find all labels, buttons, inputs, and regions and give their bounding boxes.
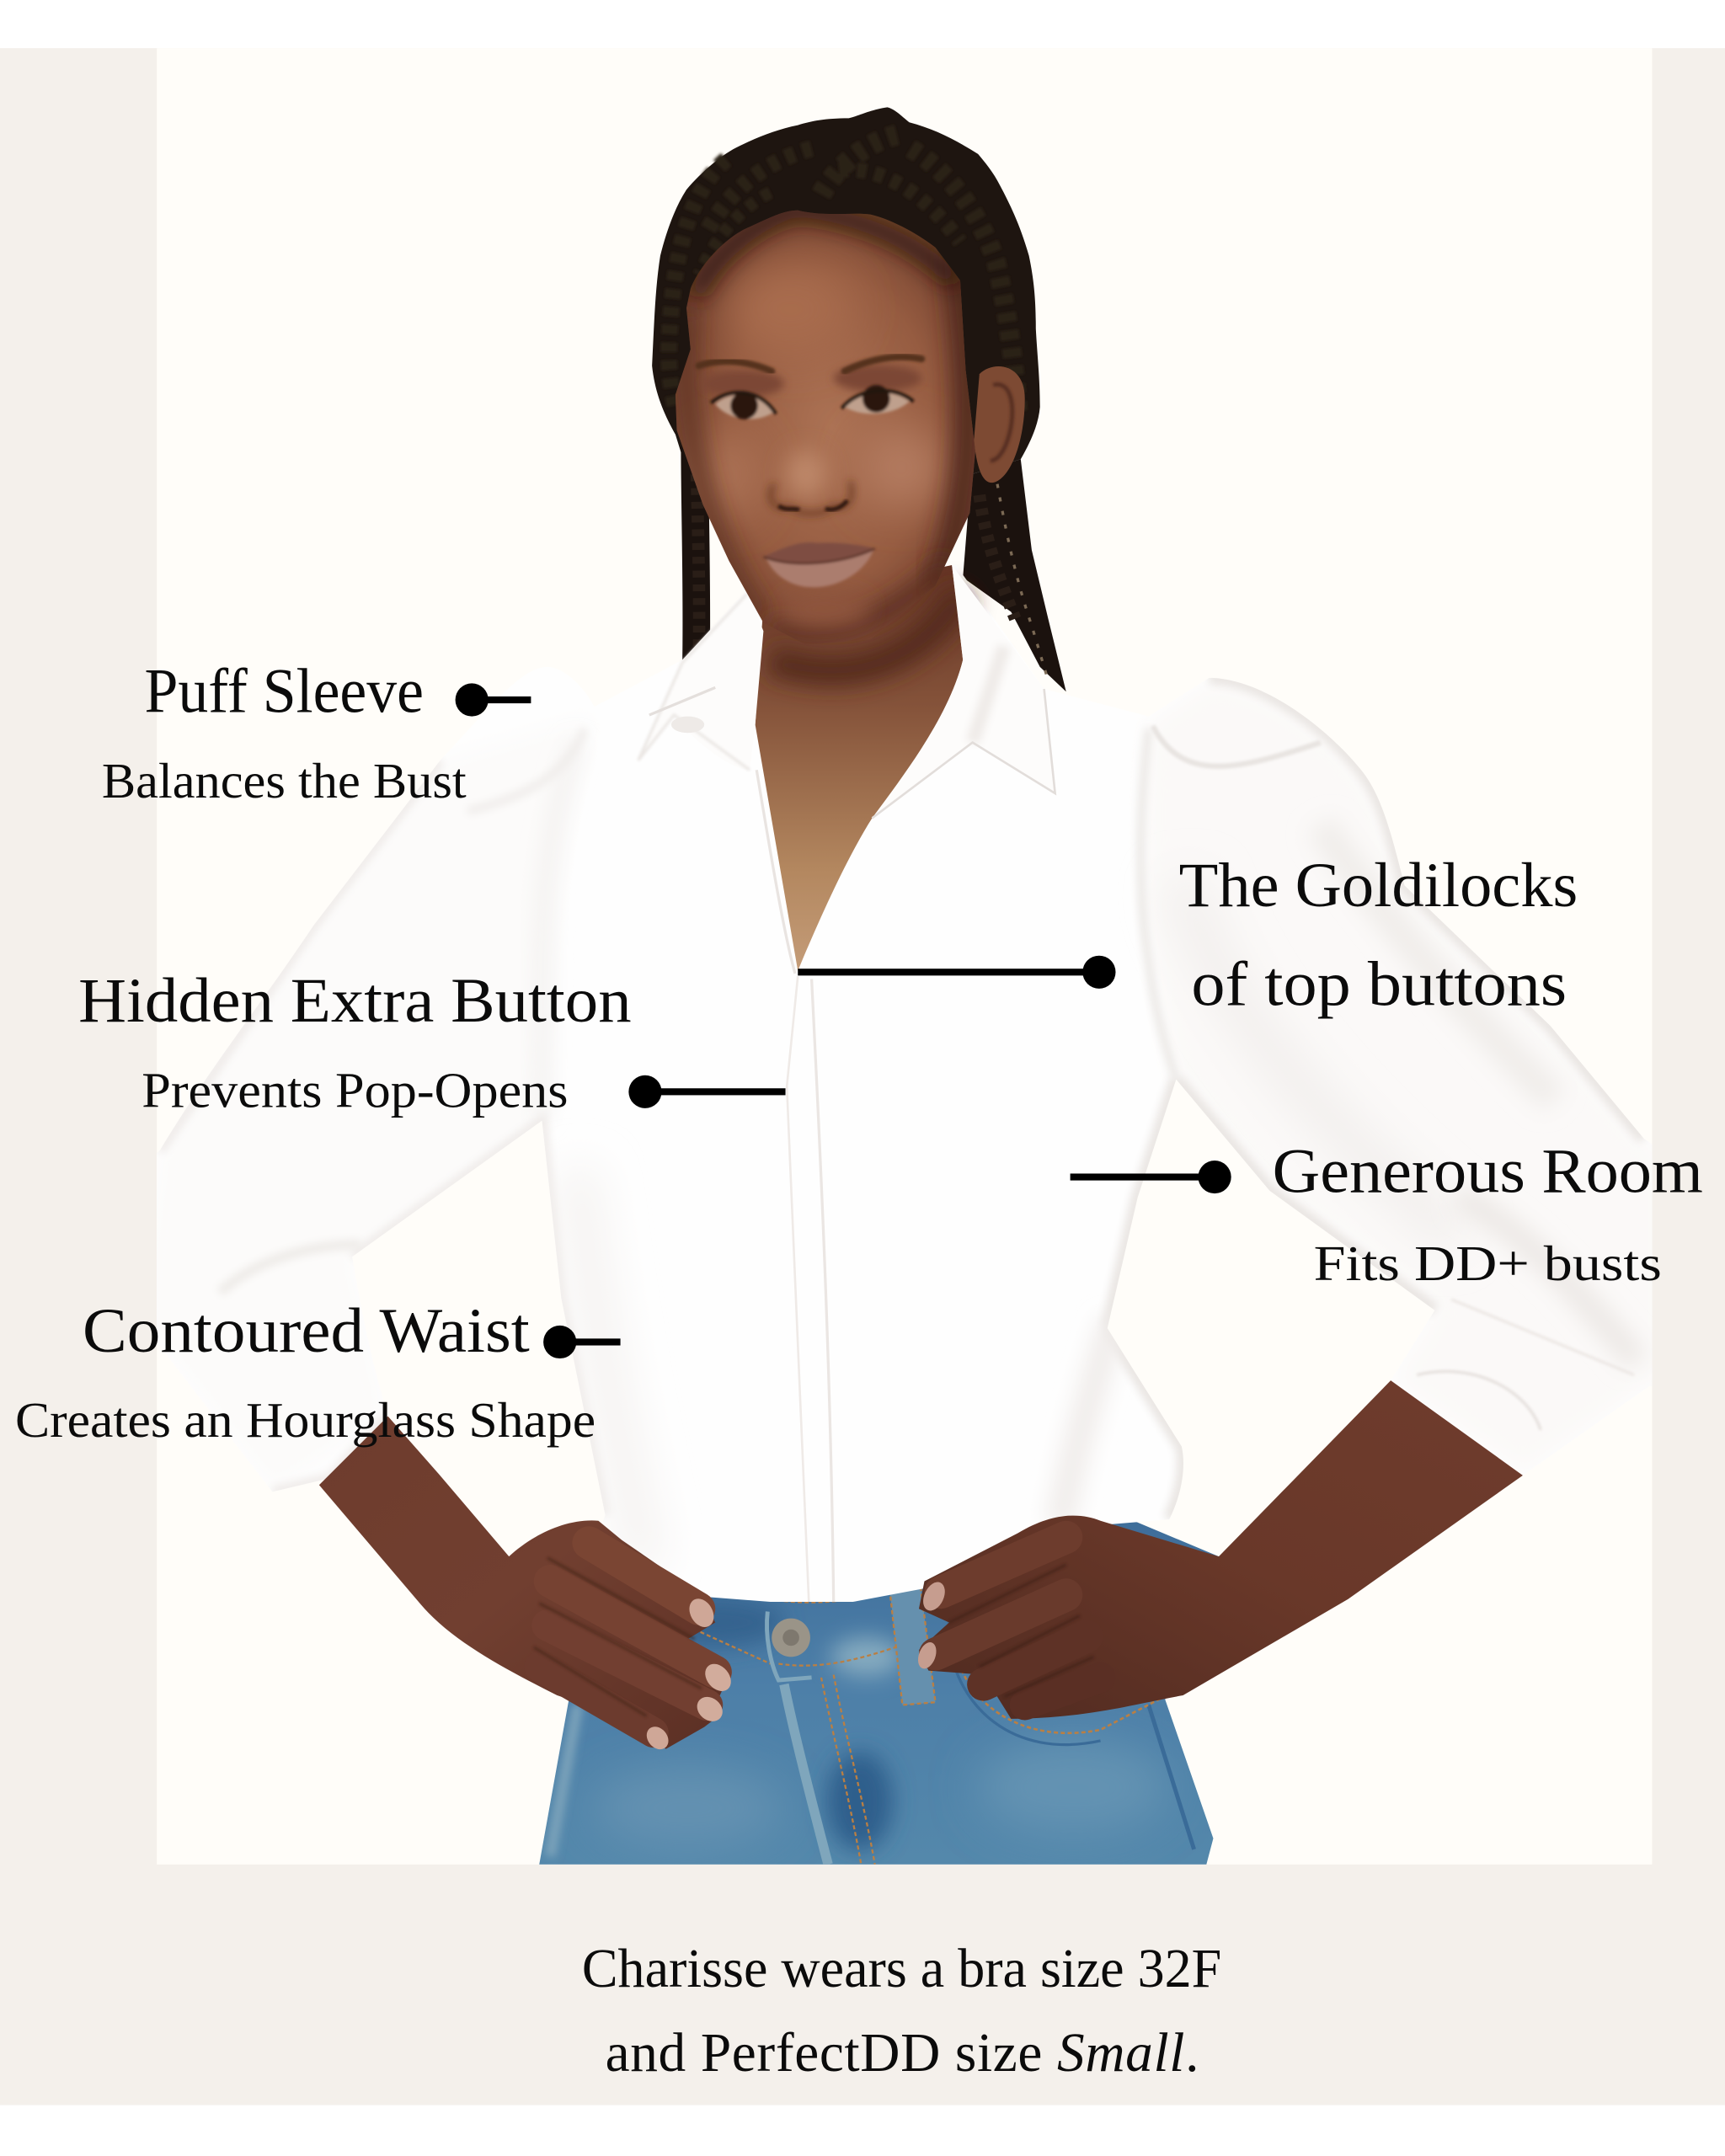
pointer: puff sleeve [456, 683, 531, 717]
pointer: generous room [1071, 1161, 1231, 1193]
edge shading [1108, 678, 1644, 1519]
caption: and PerfectDD size Small. [606, 2023, 1199, 2084]
left arm and hand [319, 1417, 736, 1753]
caption [582, 1939, 1221, 2084]
callout: hidden extra button [78, 966, 786, 1118]
jeans button [772, 1619, 810, 1657]
pointer: hidden extra button [628, 1075, 786, 1108]
jeans [539, 1510, 1219, 1865]
heading: the goldilocks of top buttons: The Goldilocks [1179, 851, 1578, 921]
eye sockets [702, 370, 784, 398]
inner cream panel [157, 48, 1652, 1865]
face shading [728, 263, 854, 356]
right braids [963, 459, 1066, 691]
arms and hands [319, 1380, 1523, 1753]
lips [763, 542, 875, 587]
placket [787, 976, 809, 1602]
model figure [137, 107, 1671, 1865]
pocket [962, 1673, 1161, 1735]
eyes [711, 385, 913, 419]
right ear [974, 366, 1025, 483]
eyebrows [699, 361, 772, 371]
neck and chest [756, 565, 963, 971]
sleeve tone [1143, 680, 1671, 1476]
heading: puff sleeve: Puff Sleeve [144, 657, 424, 727]
fly [766, 1611, 812, 1680]
collar right [872, 565, 1055, 818]
text: creates an hourglass shape: Creates an Hourglass Shape [15, 1393, 595, 1448]
nose [771, 450, 852, 514]
waistband [700, 1630, 770, 1664]
sleeve folds [1321, 825, 1554, 1100]
caption: Charisse wears a bra size 32F [582, 1939, 1221, 1999]
text: fits dd+ busts: Fits DD+ busts [1314, 1236, 1662, 1291]
pointer: goldilocks [798, 956, 1116, 989]
callout: generous room [1071, 1137, 1703, 1291]
callout: contoured waist [15, 1296, 621, 1448]
text: balances the bust: Balances the Bust [102, 754, 467, 808]
callout: goldilocks [798, 851, 1578, 1019]
heading: hidden extra button: Hidden Extra Button [78, 966, 632, 1036]
pointer: contoured waist [543, 1326, 621, 1358]
left braid [695, 447, 697, 663]
shirt [137, 565, 1671, 1602]
right arm and hand [915, 1380, 1523, 1719]
hair [652, 107, 1066, 691]
heading: generous room: Generous Room [1273, 1137, 1703, 1207]
callout: puff sleeve [102, 657, 531, 808]
face [676, 211, 975, 645]
heading: contoured waist: Contoured Waist [83, 1296, 530, 1366]
text: prevents pop-opens: Prevents Pop-Opens [142, 1063, 569, 1118]
braid texture [669, 135, 1018, 413]
belt loop [890, 1584, 936, 1705]
torso shading [574, 1199, 645, 1538]
heading: the goldilocks of top buttons: of top buttons [1191, 949, 1567, 1019]
collar left [638, 590, 763, 770]
